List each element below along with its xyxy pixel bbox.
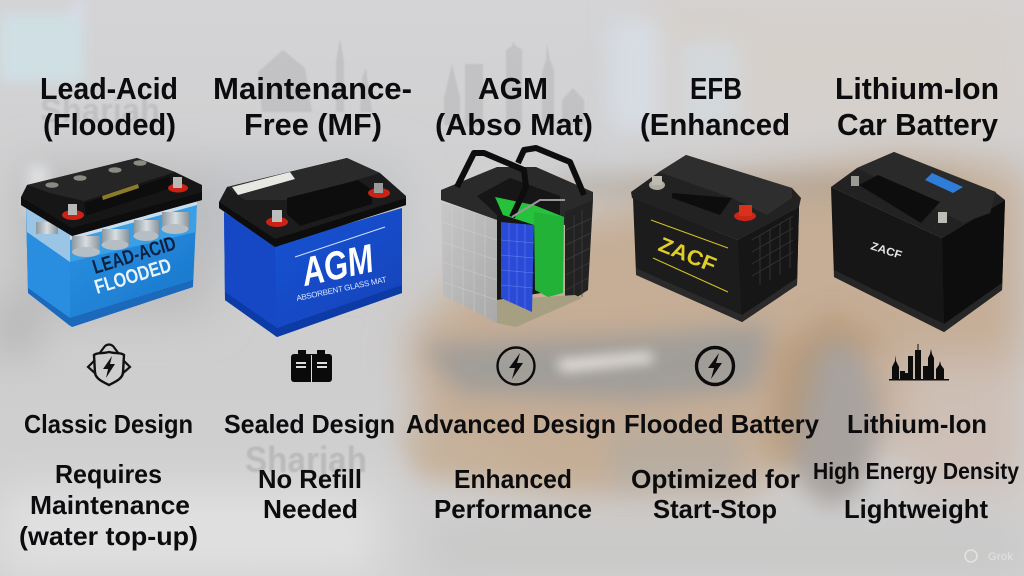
heading: Maintenance-Free (MF): Maintenance- <box>213 71 412 106</box>
icon: shield with bolt <box>88 344 130 385</box>
label: Flooded Battery: Flooded Battery <box>624 409 820 439</box>
heading: Lithium-Ion Car Battery: Lithium-Ion <box>835 71 999 106</box>
battery: lead-acid flooded: LEAD-ACID <box>90 233 179 279</box>
icon: city skyline <box>889 344 949 380</box>
heading: Lead-Acid (Flooded) <box>40 71 178 142</box>
text: requires maintenance: Requires <box>55 459 162 489</box>
label: Lithium-Ion: Lithium-Ion <box>847 409 987 439</box>
heading: Lithium-Ion Car Battery <box>835 71 999 142</box>
battery: EFB <box>631 155 801 322</box>
watermark: Sharjah ghost text and skylines: Grok <box>988 551 1014 563</box>
battery: AGM cutaway <box>441 148 593 327</box>
battery: lithium-ion <box>831 152 1005 332</box>
battery: lead-acid flooded <box>21 158 202 327</box>
battery: lead-acid flooded: FLOODED <box>92 255 174 299</box>
heading: Maintenance-Free (MF) <box>213 71 412 142</box>
heading: AGM (Abso Mat): AGM <box>478 71 548 106</box>
text: enhanced performance: Enhanced <box>454 464 572 494</box>
text: no refill needed <box>258 464 362 524</box>
text: optimized for start-stop: Optimized for <box>631 464 800 494</box>
text: optimized for start-stop: Start-Stop <box>653 494 777 524</box>
icon: bolt circle bold <box>696 348 734 384</box>
battery: maintenance-free: ABSORBENT GLASS MAT <box>296 275 388 303</box>
heading: EFB (Enhanced <box>640 71 790 142</box>
battery: maintenance-free <box>219 158 406 337</box>
text: requires maintenance <box>19 459 198 551</box>
watermark: Sharjah ghost text and skylines: Sharjah <box>40 92 160 130</box>
text: enhanced performance: Performance <box>434 494 592 524</box>
heading: Lead-Acid (Flooded): Lead-Acid <box>40 71 178 106</box>
heading: AGM (Abso Mat) <box>435 71 593 142</box>
battery: lithium-ion: ZACF <box>869 240 904 262</box>
label: Sealed Design: Sealed Design <box>224 409 395 439</box>
text: optimized for start-stop <box>631 464 800 524</box>
text: requires maintenance: (water top-up) <box>19 521 198 551</box>
text: high energy density lightweight: Lightweight <box>844 494 988 524</box>
text: requires maintenance: Maintenance <box>30 490 190 520</box>
heading: EFB (Enhanced: (Enhanced <box>640 107 790 142</box>
label: Classic Design: Classic Design <box>24 409 193 439</box>
heading: AGM (Abso Mat): (Abso Mat) <box>435 107 593 142</box>
icon: battery <box>291 350 332 382</box>
watermark: Sharjah ghost text and skylines: Sharjah <box>245 439 367 480</box>
text: high energy density lightweight <box>813 458 1019 524</box>
icon: bolt circle <box>498 348 534 384</box>
heading: EFB (Enhanced: EFB <box>690 71 742 106</box>
text: no refill needed: No Refill <box>258 464 362 494</box>
heading: Lead-Acid (Flooded): (Flooded) <box>43 107 176 142</box>
text: enhanced performance <box>434 464 592 524</box>
label: Advanced Design: Advanced Design <box>406 409 616 439</box>
heading: Maintenance-Free (MF): Free (MF) <box>244 107 382 142</box>
text: no refill needed: Needed <box>263 494 358 524</box>
battery: EFB: ZACF <box>655 233 720 277</box>
battery: maintenance-free: AGM <box>297 237 379 295</box>
heading: Lithium-Ion Car Battery: Car Battery <box>837 107 999 142</box>
